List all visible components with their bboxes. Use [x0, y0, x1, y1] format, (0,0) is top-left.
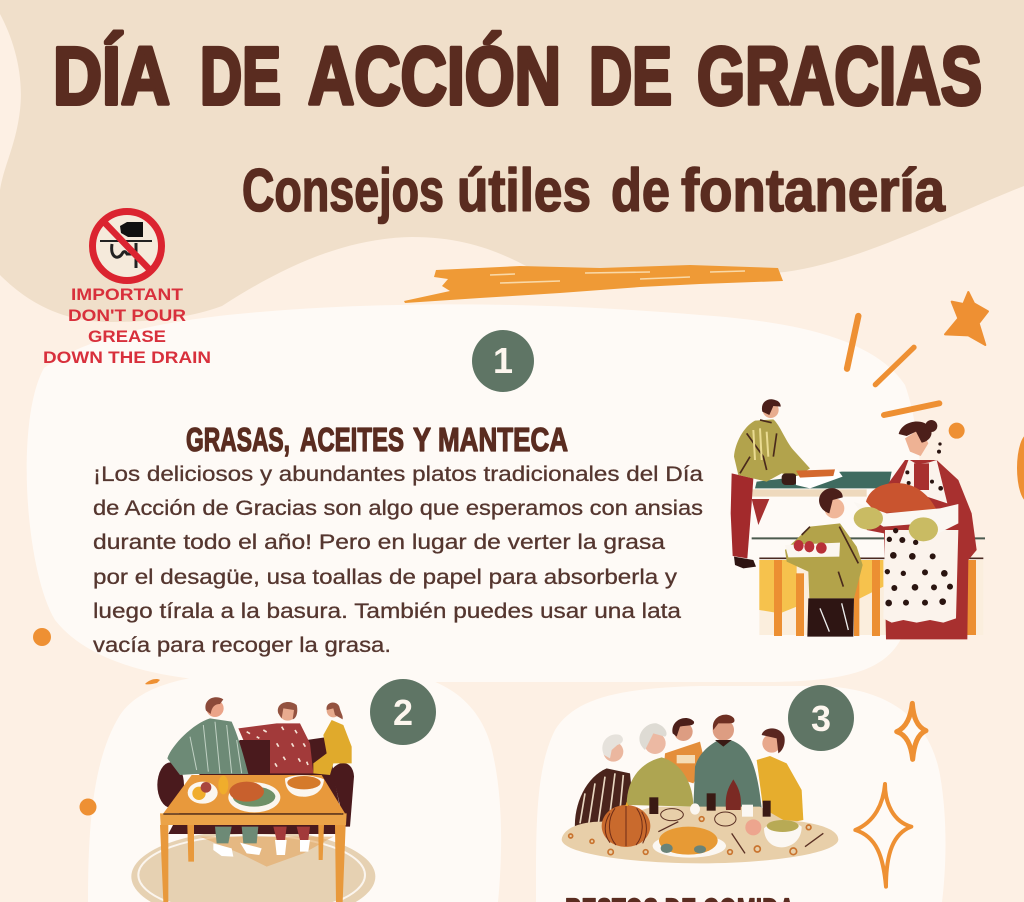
warning sign: do not pour grease	[43, 212, 211, 367]
title: ACCIÓN	[308, 31, 561, 122]
large sparkle	[855, 784, 911, 887]
striped base	[759, 560, 983, 636]
number badge 1	[472, 330, 534, 392]
panel 3 background	[536, 686, 946, 902]
section body text: por el desagüe, usa toallas de papel para absorberla y	[93, 566, 678, 589]
illustration: family serving dinner	[731, 292, 988, 639]
star and rays	[847, 292, 988, 439]
subtitle: fontanería	[681, 157, 946, 224]
section heading: grasas: ACEITES	[300, 421, 404, 458]
table	[562, 807, 838, 863]
small sparkle	[897, 703, 926, 759]
brush stroke	[404, 265, 783, 303]
sign icon	[92, 212, 162, 280]
man	[731, 399, 843, 568]
number badge 3	[788, 685, 854, 751]
illustration: family at table	[562, 703, 926, 887]
section heading: grasas: GRASAS,	[186, 421, 290, 458]
section heading: grasas: MANTECA	[438, 421, 568, 458]
rug	[131, 830, 375, 902]
section body text: durante todo el año! Pero en lugar de verter la grasa	[93, 531, 665, 554]
title	[53, 31, 982, 122]
illustration: family on sofa	[131, 697, 375, 902]
number badge 2: 2	[393, 692, 413, 733]
decorative orange dots	[33, 434, 1024, 816]
counter	[755, 472, 892, 488]
sofa	[157, 737, 354, 834]
subtitle: Consejos	[242, 157, 444, 224]
section body text: ¡Los deliciosos y abundantes platos tradicionales del Día	[93, 463, 703, 486]
man in green sweater	[167, 697, 262, 857]
panel 2 background	[88, 672, 501, 902]
subtitle: útiles	[457, 157, 591, 224]
woman in red pyjamas	[238, 702, 313, 855]
sign text	[43, 285, 211, 367]
panel 1 background	[27, 304, 922, 682]
section body text: luego tírala a la basura. También puedes usar una lata	[93, 600, 681, 623]
section body text	[93, 463, 703, 657]
people	[575, 715, 803, 832]
beige header blob	[0, 0, 1024, 322]
number badge 3: 3	[811, 698, 831, 739]
bowl and glasses	[569, 779, 823, 855]
sign text: DON'T POUR	[68, 306, 186, 325]
sign text: IMPORTANT	[71, 285, 184, 304]
number badge 2	[370, 679, 436, 745]
boy	[785, 488, 863, 637]
title: DE	[200, 31, 281, 122]
sign text: DOWN THE DRAIN	[43, 348, 211, 367]
subtitle	[242, 157, 946, 224]
sign text: GREASE	[88, 327, 166, 346]
title: DE	[589, 31, 672, 122]
subtitle: de	[611, 157, 670, 224]
section heading: grasas	[186, 421, 568, 458]
number badge 1: 1	[493, 340, 513, 381]
section heading: grasas: Y	[413, 421, 431, 458]
child in yellow	[313, 703, 352, 775]
section body text: vacía para recoger la grasa.	[93, 634, 391, 657]
woman with turkey	[853, 420, 977, 639]
pumpkin	[602, 802, 650, 847]
turkey platter	[653, 827, 726, 858]
title: DÍA	[53, 31, 170, 122]
table	[160, 775, 347, 902]
section body text: de Acción de Gracias son algo que esperamos con ansias	[93, 497, 703, 520]
table dishes	[188, 775, 324, 812]
